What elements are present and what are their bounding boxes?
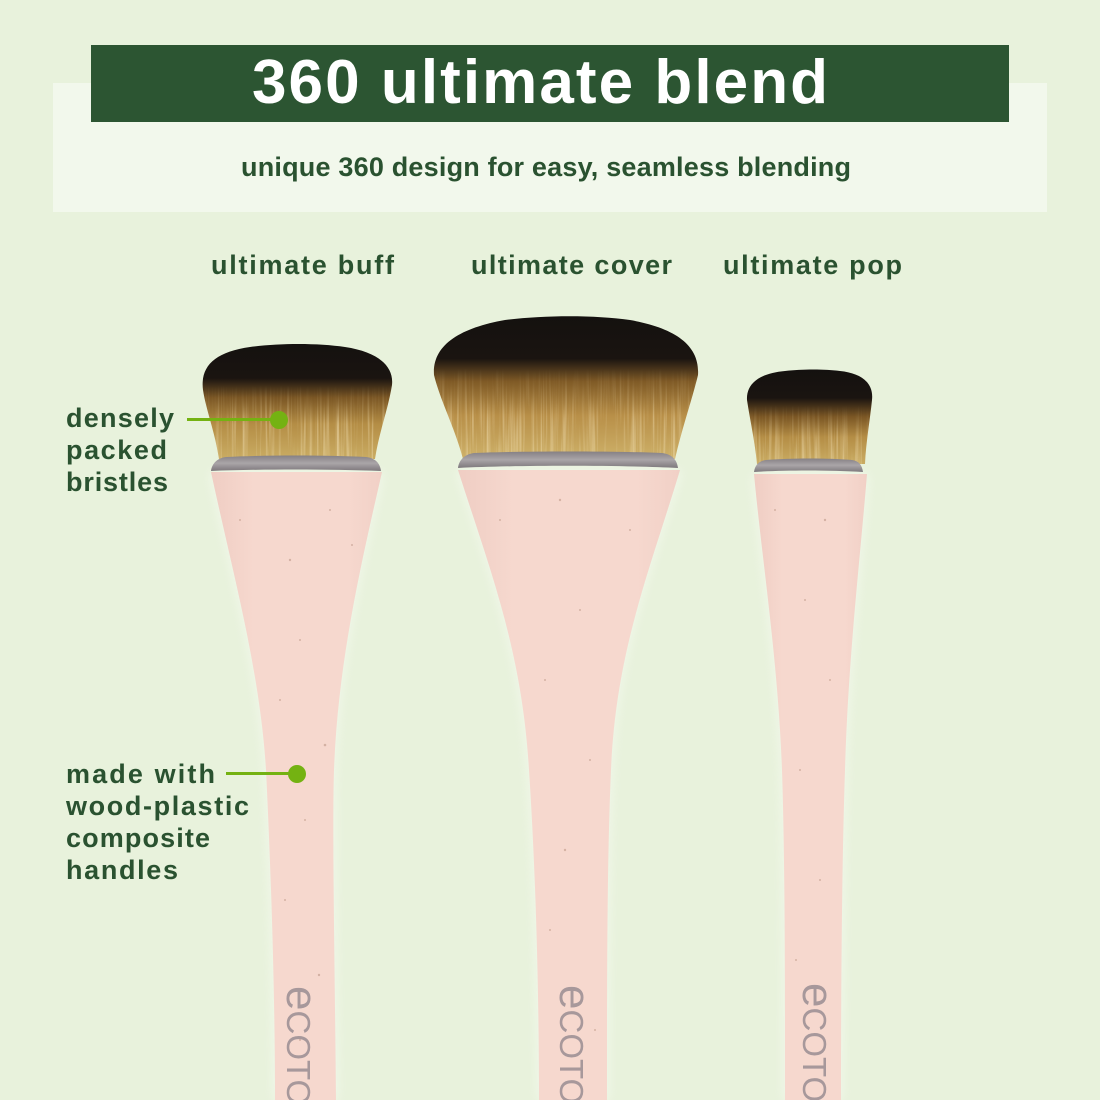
bristles: [202, 344, 392, 459]
callout pointer: [187, 411, 288, 429]
callout: wood-plastic handles: wood-plastic: [65, 791, 249, 821]
handle logo: e COTO: [793, 983, 842, 1100]
handle: [458, 470, 680, 1100]
ferrule: [458, 452, 678, 468]
title banner: [91, 45, 1009, 122]
callout: densely packed bristles: bristles: [66, 467, 168, 497]
brush: ultimate pop: [744, 367, 876, 1100]
callout: wood-plastic handles: handles: [66, 855, 178, 885]
handle speckles: [774, 509, 831, 961]
handle: [211, 472, 382, 1100]
brush name: ultimate cover: ultimate cover: [471, 250, 672, 280]
subtitle panel: [53, 83, 1047, 212]
title text: 360 ultimate blend: [252, 48, 828, 117]
handle speckles: [239, 509, 353, 1041]
handle: [754, 474, 867, 1100]
ferrule: [754, 458, 863, 472]
callout: wood-plastic handles: made with: [66, 759, 215, 789]
callout pointer: [226, 765, 306, 783]
callout: densely packed bristles: [66, 403, 288, 497]
ferrule: [211, 456, 381, 471]
handle speckles: [499, 499, 631, 1031]
callout: wood-plastic handles: composite: [66, 823, 210, 853]
brush: ultimate buff: [195, 340, 400, 1100]
callout: wood-plastic handles: [65, 759, 306, 885]
bristles: [744, 367, 876, 467]
bristles: [430, 312, 702, 462]
brush name: ultimate buff: ultimate buff: [211, 250, 395, 280]
brush: ultimate cover: [430, 312, 702, 1100]
subtitle text: unique 360 design for easy, seamless blending: [241, 152, 851, 182]
callout: densely packed bristles: densely: [66, 403, 174, 433]
brush name: ultimate pop: ultimate pop: [723, 250, 902, 280]
callout: densely packed bristles: packed: [66, 435, 167, 465]
